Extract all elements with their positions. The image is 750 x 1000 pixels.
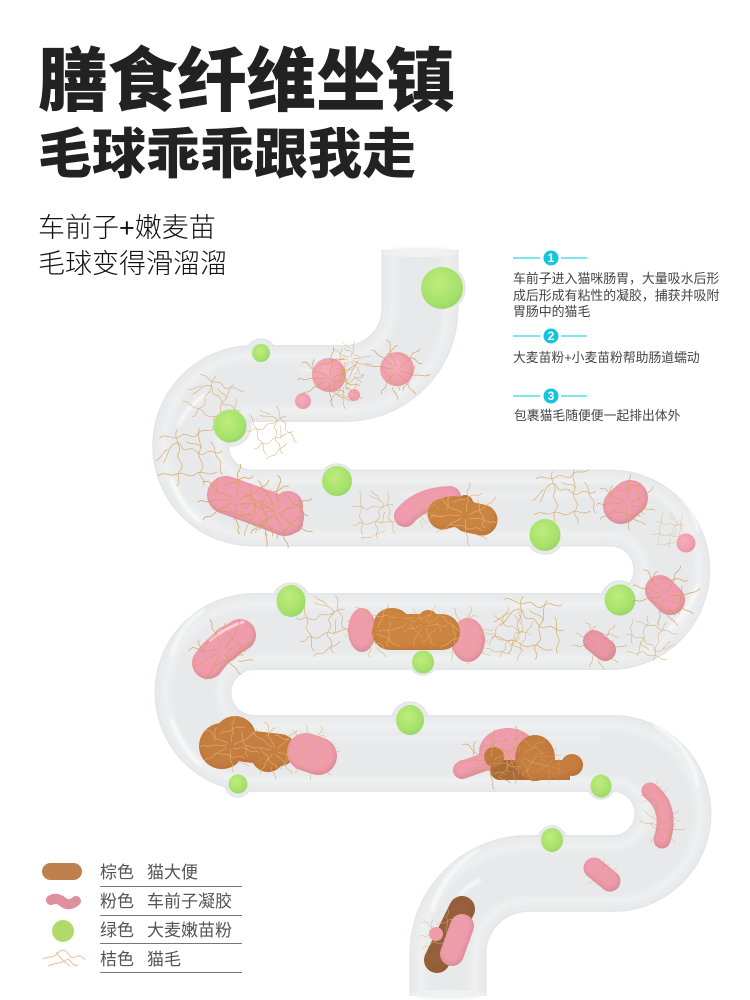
legend row: orange: 桔色 猫毛 [100, 950, 181, 969]
second row: pink and brown blob, centre [400, 483, 497, 546]
legend row: brown [100, 862, 242, 887]
lower bend: small pink capsule [585, 859, 618, 890]
intro text: 毛球变得滑溜溜 [38, 249, 227, 279]
intro text [38, 213, 227, 279]
right bend: curved pink gel [632, 781, 692, 855]
legend icons [42, 863, 86, 966]
step 2 marker [513, 328, 587, 344]
intro text: 车前子+嫩麦苗 [38, 213, 216, 243]
fourth row: pink and brown blob, centre [459, 714, 583, 795]
legend row: green: 绿色 大麦嫩苗粉 [100, 921, 232, 940]
third row: small pink capsule [565, 610, 633, 678]
step 3 text: 包裹猫毛随便便一起排出体外 [514, 408, 680, 423]
legend [42, 863, 242, 973]
step 1 marker: 1 [548, 251, 555, 265]
step 1 text: 车前子进入猫咪肠胃，大量吸水后形 [513, 271, 719, 286]
tube highlights [172, 370, 698, 910]
tube openings [382, 249, 458, 257]
bottom pipe: brown and pink blob [419, 909, 470, 960]
second row: pink gel blob, left [198, 462, 327, 560]
upper row: pink psyllium balls with hair [295, 325, 440, 415]
green barley spheres [214, 267, 636, 852]
step 3 marker [513, 388, 587, 404]
third row: pink gel blob, left [177, 606, 265, 693]
step 1 marker [513, 250, 587, 266]
fourth row: brown and pink blob, left [199, 709, 343, 789]
step 1 text: 成后形成有粘性的凝胶，捕获并吸附 [513, 288, 719, 302]
tube bumps around spheres [211, 265, 639, 854]
intestine tube [172, 249, 698, 998]
step 1 text [513, 271, 719, 319]
legend row: orange [100, 949, 242, 973]
right bend: pink balls [623, 534, 707, 635]
step 2 text: 大麦苗粉+小麦苗粉帮助肠道蠕动 [513, 350, 700, 365]
loose cat hair strands [156, 366, 687, 667]
legend row: brown: 棕色 猫大便 [100, 863, 198, 882]
second row: pink gel blob, right [596, 474, 655, 530]
legend row: pink: 粉色 车前子凝胶 [100, 892, 232, 911]
subtitle: 毛球乖乖跟我走 [38, 125, 416, 185]
title: 膳食纤维坐镇 [38, 42, 455, 120]
step 1 text: 胃肠中的猫毛 [513, 304, 590, 319]
step 2 marker: 2 [548, 329, 555, 343]
third row: pink and brown blob, centre [338, 593, 502, 671]
step 3 marker: 3 [548, 389, 555, 403]
